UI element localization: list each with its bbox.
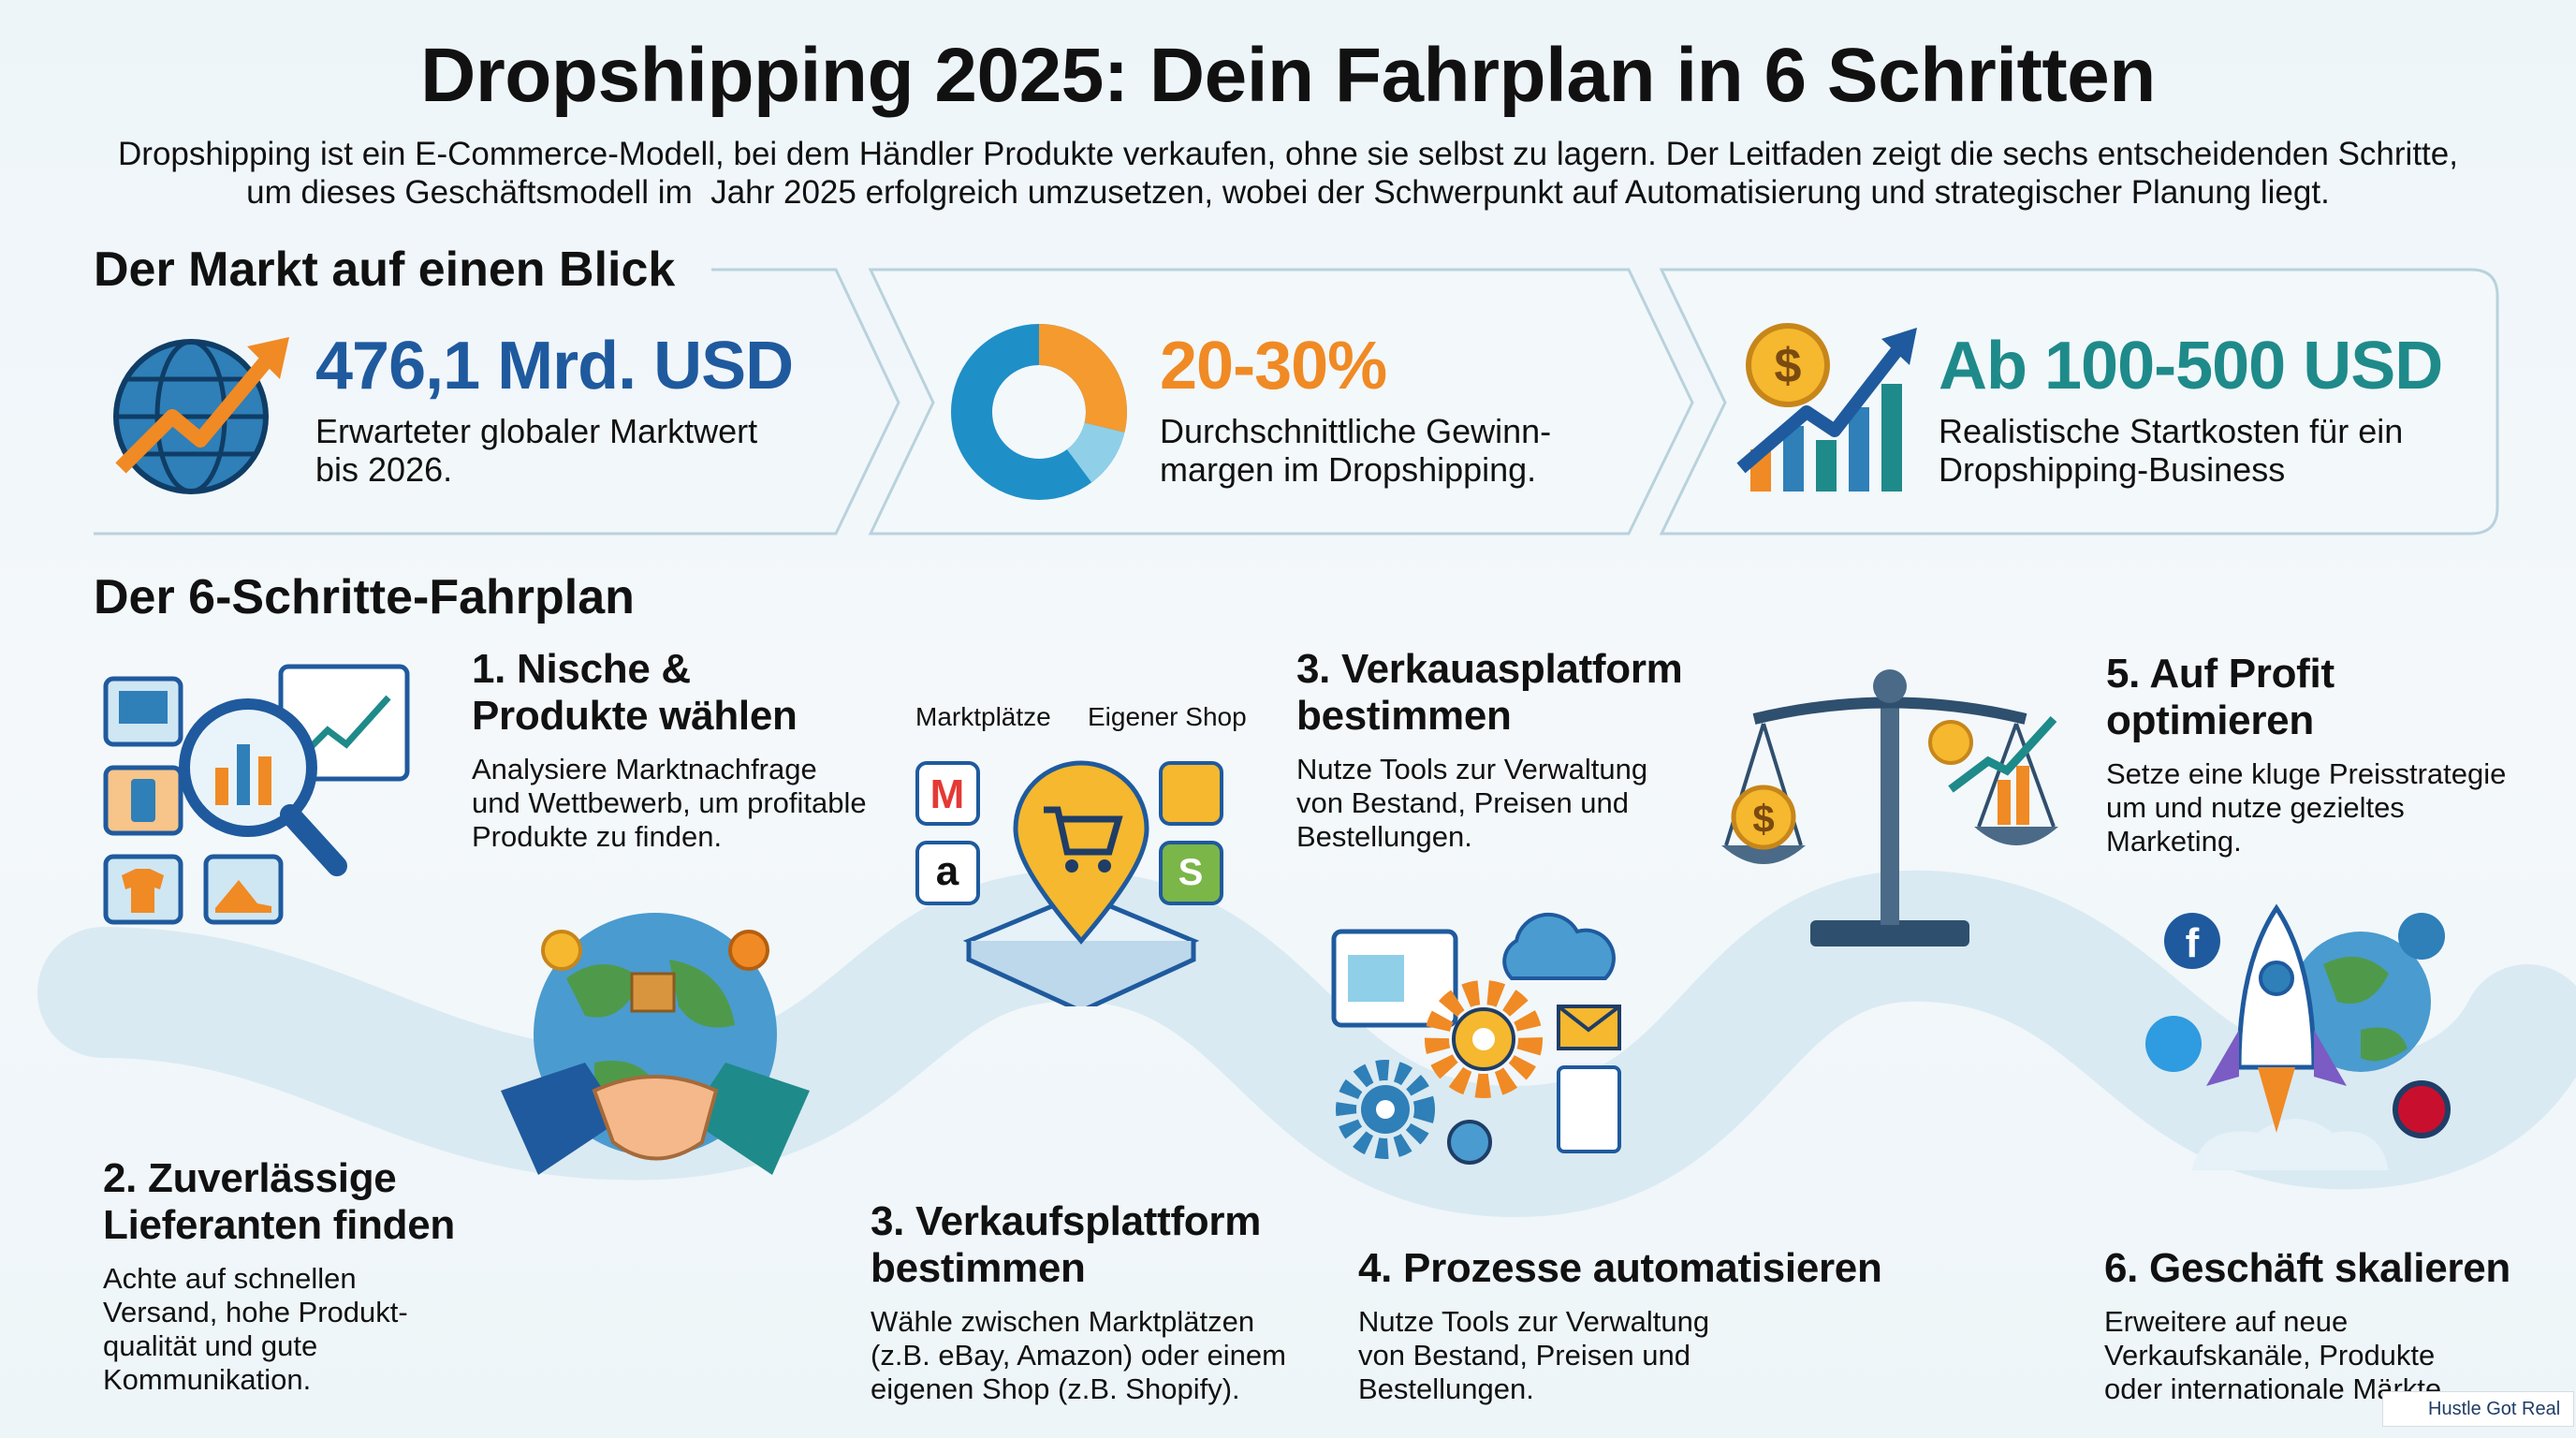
intro text: um dieses Geschäftsmodell im Jahr 2025 erfolgreich umzusetzen, wobei der Schwerpunkt auf Automatisierung und strategischer Planung liegt.	[246, 174, 2330, 211]
step 1 text: Produkte wählen	[472, 693, 798, 739]
description: Erwarteter globaler Marktwert	[315, 412, 757, 450]
description: Dropshipping-Business	[1939, 450, 2285, 489]
step 1 text: 1. Nische &	[472, 646, 691, 692]
description	[315, 412, 757, 489]
stat 1	[113, 329, 793, 494]
step 3 text (top): von Bestand, Preisen und	[1296, 786, 1629, 819]
step 4 text: Nutze Tools zur Verwaltung	[1358, 1305, 1709, 1338]
step 1 text: Produkte zu finden.	[472, 820, 722, 853]
labels: Marktplätze	[915, 702, 1051, 731]
illustration: step 3 platform: Eigener Shop	[1088, 702, 1247, 731]
step 5 text: 5. Auf Profit	[2106, 651, 2334, 697]
step 3 text (top): Bestellungen.	[1296, 820, 1472, 853]
intro text: Dropshipping ist ein E-Commerce-Modell, bei dem Händler Produkte verkaufen, ohne sie selbst zu lagern. Der Leitfaden zeigt die sechs entscheidenden Schritte,	[118, 136, 2458, 172]
step 2 text: Kommunikation.	[103, 1363, 311, 1396]
step 3 text (top)	[1296, 646, 1683, 853]
description	[1160, 412, 1551, 489]
icon: coin with growth chart	[1737, 323, 1917, 492]
step 1 text: Analysiere Marktnachfrage	[472, 753, 817, 785]
step 5 text: Setze eine kluge Preisstrategie	[2106, 757, 2506, 790]
step 3 text (bottom): bestimmen	[871, 1245, 1086, 1291]
description	[1939, 412, 2403, 489]
stat 2	[951, 324, 1551, 500]
step 3 text (bottom): 3. Verkaufsplattform	[871, 1198, 1261, 1244]
illustration: step 3 platform: S	[1178, 852, 1203, 893]
illustration: step 1 research	[103, 665, 410, 925]
step 6 text: Erweitere auf neue	[2104, 1305, 2348, 1338]
description: Durchschnittliche Gewinn-	[1160, 412, 1551, 450]
description: Realistische Startkosten für ein	[1939, 412, 2403, 450]
step 3 text (top): Nutze Tools zur Verwaltung	[1296, 753, 1647, 785]
step 4 text: Bestellungen.	[1358, 1372, 1534, 1405]
value: Ab 100-500 USD	[1939, 329, 2442, 404]
step 4 text: 4. Prozesse automatisieren	[1358, 1245, 1882, 1291]
illustration: step 3 platform: M	[930, 771, 964, 817]
illustration: step 2 handshake globe	[501, 913, 810, 1175]
wave road	[37, 871, 2576, 1217]
step 3 text (bottom): (z.B. eBay, Amazon) oder einem	[871, 1339, 1286, 1372]
watermark	[2382, 1391, 2574, 1427]
step 5 text: um und nutze gezieltes	[2106, 791, 2405, 824]
step 2 text: qualität und gute	[103, 1329, 317, 1362]
watermark: Hustle Got Real	[2428, 1399, 2560, 1419]
step 3 text (bottom): eigenen Shop (z.B. Shopify).	[871, 1372, 1240, 1405]
icon: globe with arrow	[113, 337, 289, 494]
step 6 text: Verkaufskanäle, Produkte	[2104, 1339, 2435, 1372]
description: margen im Dropshipping.	[1160, 450, 1536, 489]
step 2 text: Lieferanten finden	[103, 1202, 455, 1248]
icon: coin with growth chart: $	[1775, 339, 1802, 393]
illustration: step 4 automation gears	[1331, 912, 1621, 1165]
step 2 text	[103, 1155, 455, 1396]
step 4 text: von Bestand, Preisen und	[1358, 1339, 1690, 1372]
step 5 text: optimieren	[2106, 697, 2314, 743]
section heading: roadmap: Der 6-Schritte-Fahrplan	[94, 570, 635, 624]
stat 3	[1737, 323, 2442, 492]
illustration: step 6 rocket	[2145, 904, 2451, 1170]
illustration: step 5 scale	[1721, 669, 2058, 946]
step 3 text (bottom): Wähle zwischen Marktplätzen	[871, 1305, 1254, 1338]
illustration: step 3 platform: a	[936, 848, 959, 894]
step 6 text	[2104, 1245, 2510, 1405]
step 1 text: und Wettbewerb, um profitable	[472, 786, 867, 819]
illustration: step 6 rocket: f	[2186, 920, 2200, 966]
stat panels outline	[94, 268, 2499, 536]
step 6 text: oder internationale Märkte	[2104, 1372, 2441, 1405]
description: bis 2026.	[315, 450, 452, 489]
intro text	[118, 136, 2458, 211]
step 6 text: 6. Geschäft skalieren	[2104, 1245, 2510, 1291]
step 3 text (bottom)	[871, 1198, 1286, 1405]
step 2 text: 2. Zuverlässige	[103, 1155, 396, 1201]
icon: donut chart	[951, 324, 1127, 500]
step 1 text	[472, 646, 867, 853]
step 2 text: Achte auf schnellen	[103, 1262, 357, 1295]
step 2 text: Versand, hohe Produkt-	[103, 1296, 408, 1328]
step 3 text (top): 3. Verkauasplatform	[1296, 646, 1683, 692]
step 4 text	[1358, 1245, 1882, 1405]
step 3 text (top): bestimmen	[1296, 693, 1512, 739]
step 5 text: Marketing.	[2106, 825, 2242, 858]
step 5 text	[2106, 651, 2506, 858]
title: Dropshipping 2025: Dein Fahrplan in 6 Schritten	[420, 33, 2156, 118]
value: 476,1 Mrd. USD	[315, 329, 793, 404]
illustration: step 5 scale: $	[1752, 797, 1775, 841]
value: 20-30%	[1160, 329, 1386, 404]
section heading: market: Der Markt auf einen Blick	[94, 242, 675, 297]
illustration: step 3 platform	[915, 702, 1247, 1006]
